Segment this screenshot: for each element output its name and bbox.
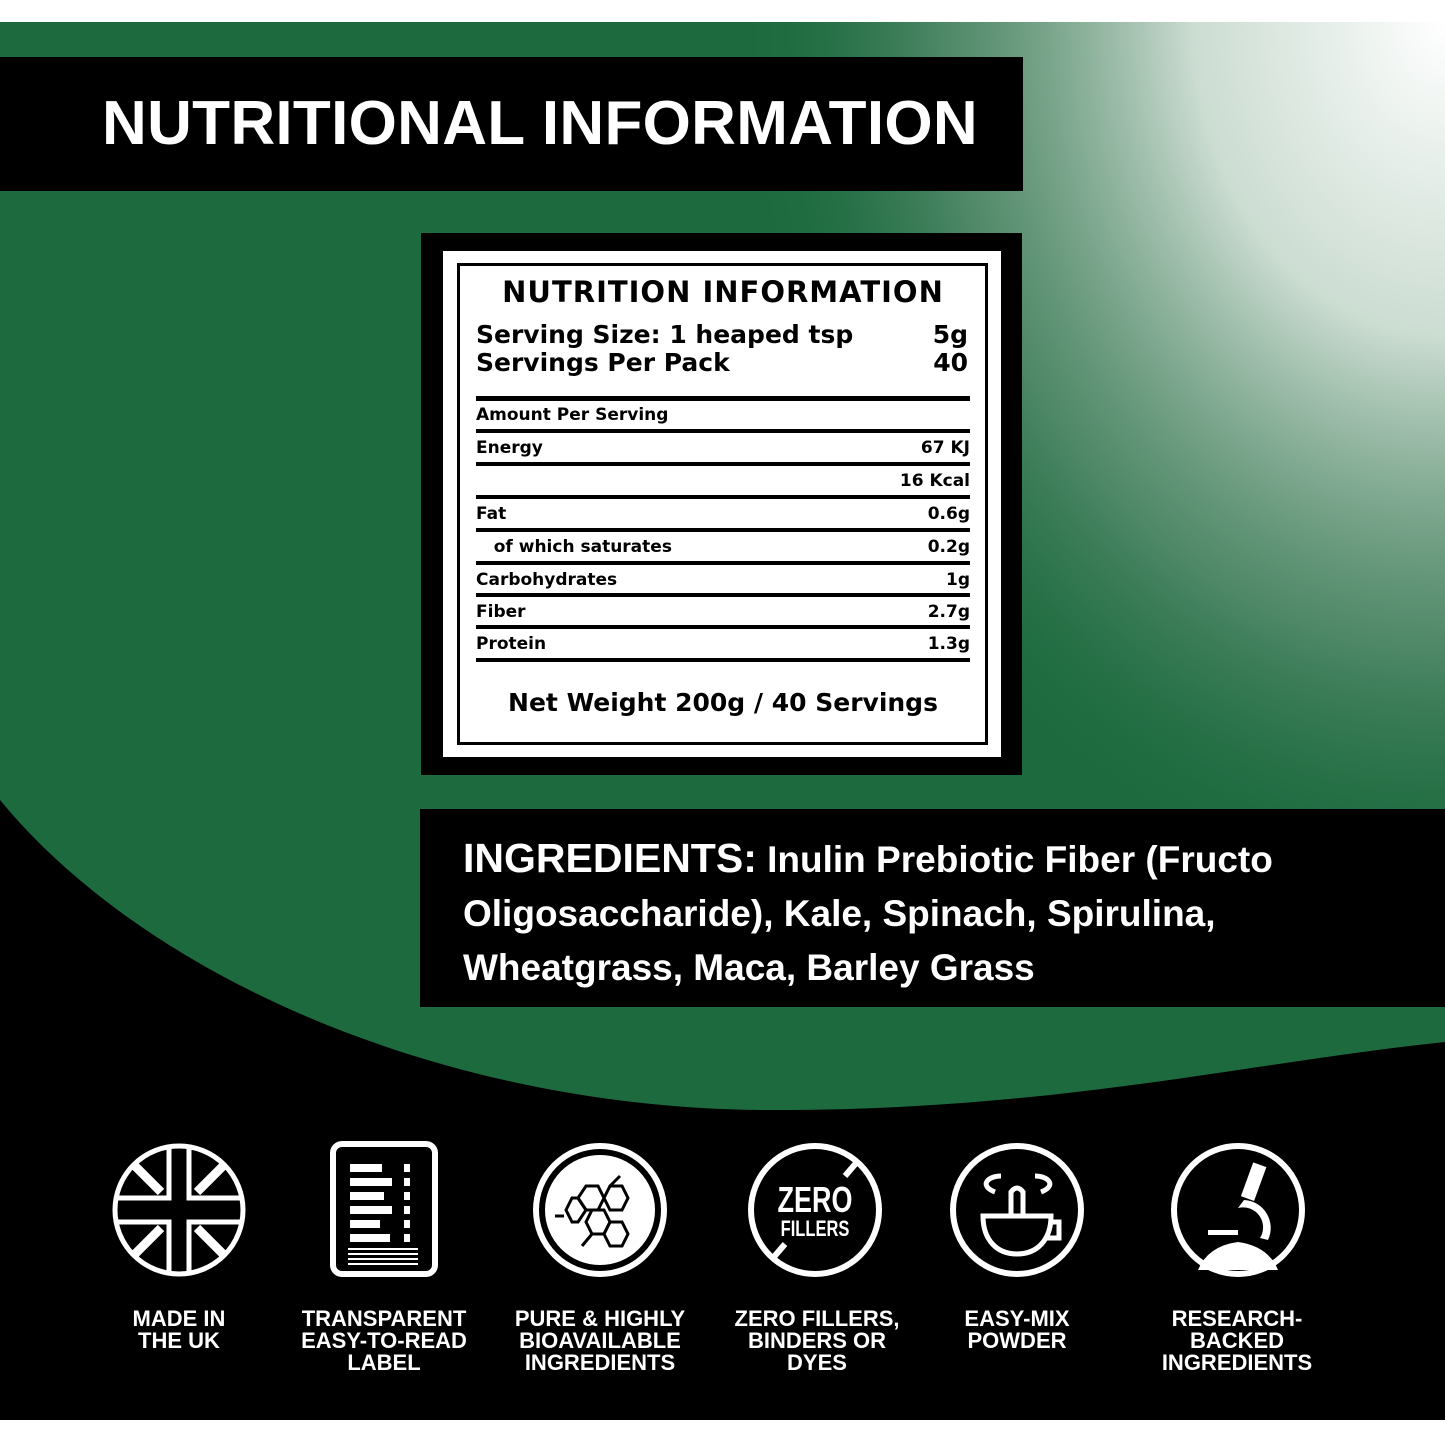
icon: zero fillers bbox=[751, 1146, 879, 1274]
ingredients panel: INGREDIENTS: Inulin Prebiotic Fiber (Fructo bbox=[463, 835, 1273, 881]
text: Amount Per Serving bbox=[476, 405, 668, 425]
nutrition label content: NUTRITION INFORMATION bbox=[502, 275, 944, 309]
icon: UK flag bbox=[115, 1146, 243, 1274]
text: BACKED bbox=[1190, 1328, 1284, 1353]
text: Carbohydrates bbox=[476, 570, 617, 590]
title bar: NUTRITIONAL INFORMATION bbox=[102, 89, 978, 158]
text: 67 KJ bbox=[921, 438, 970, 458]
nutrition label content: 40 bbox=[933, 348, 968, 377]
text: PURE & HIGHLY bbox=[515, 1306, 685, 1331]
text: POWDER bbox=[968, 1328, 1066, 1353]
text: 2.7g bbox=[928, 602, 970, 622]
text: EASY-MIX bbox=[964, 1306, 1070, 1331]
text: BIOAVAILABLE bbox=[519, 1328, 681, 1353]
nutrition label content: Servings Per Pack bbox=[476, 348, 730, 377]
ingredients panel: Wheatgrass, Maca, Barley Grass bbox=[463, 947, 1035, 988]
text: 1g bbox=[946, 570, 970, 590]
text: 0.6g bbox=[928, 504, 970, 524]
feature labels bbox=[133, 1306, 225, 1353]
text: DYES bbox=[787, 1350, 847, 1375]
nutrition label content: 5g bbox=[933, 320, 968, 349]
text: TRANSPARENT bbox=[302, 1306, 466, 1331]
nutrition rows bbox=[476, 405, 970, 662]
nutrition label panel bbox=[421, 233, 1022, 775]
text: 0.2g bbox=[928, 537, 970, 557]
text: ZERO FILLERS, bbox=[734, 1306, 900, 1331]
icon: cup bbox=[953, 1146, 1081, 1274]
text: Fiber bbox=[476, 602, 526, 622]
icon: microscope bbox=[1174, 1146, 1302, 1274]
text: 16 Kcal bbox=[900, 471, 970, 491]
ingredients panel bbox=[420, 809, 1445, 1007]
icons row bbox=[112, 1141, 1305, 1277]
nutrition label content bbox=[476, 275, 968, 377]
feature labels: THE UK bbox=[138, 1328, 220, 1353]
text: Fat bbox=[476, 504, 506, 524]
net weight: Net Weight 200g / 40 Servings bbox=[508, 688, 938, 717]
text: RESEARCH- bbox=[1172, 1306, 1302, 1331]
text: 1.3g bbox=[928, 634, 970, 654]
icon: zero fillers: ZERO bbox=[778, 1179, 852, 1220]
text: EASY-TO-READ bbox=[301, 1328, 467, 1353]
icon: label bbox=[333, 1144, 435, 1274]
text: of which saturates bbox=[494, 537, 672, 557]
text: Energy bbox=[476, 438, 543, 458]
text: Protein bbox=[476, 634, 546, 654]
text: BINDERS OR bbox=[748, 1328, 886, 1353]
title bar bbox=[0, 57, 1023, 191]
text: INGREDIENTS bbox=[525, 1350, 675, 1375]
feature labels: MADE IN bbox=[133, 1306, 225, 1331]
text: LABEL bbox=[347, 1350, 421, 1375]
ingredients panel: Oligosaccharide), Kale, Spinach, Spirulina, bbox=[463, 893, 1216, 934]
nutrition label content: Serving Size: 1 heaped tsp bbox=[476, 320, 853, 349]
text: INGREDIENTS bbox=[1162, 1350, 1312, 1375]
icon: zero fillers: FILLERS bbox=[781, 1217, 849, 1242]
icon: molecules bbox=[536, 1146, 664, 1274]
